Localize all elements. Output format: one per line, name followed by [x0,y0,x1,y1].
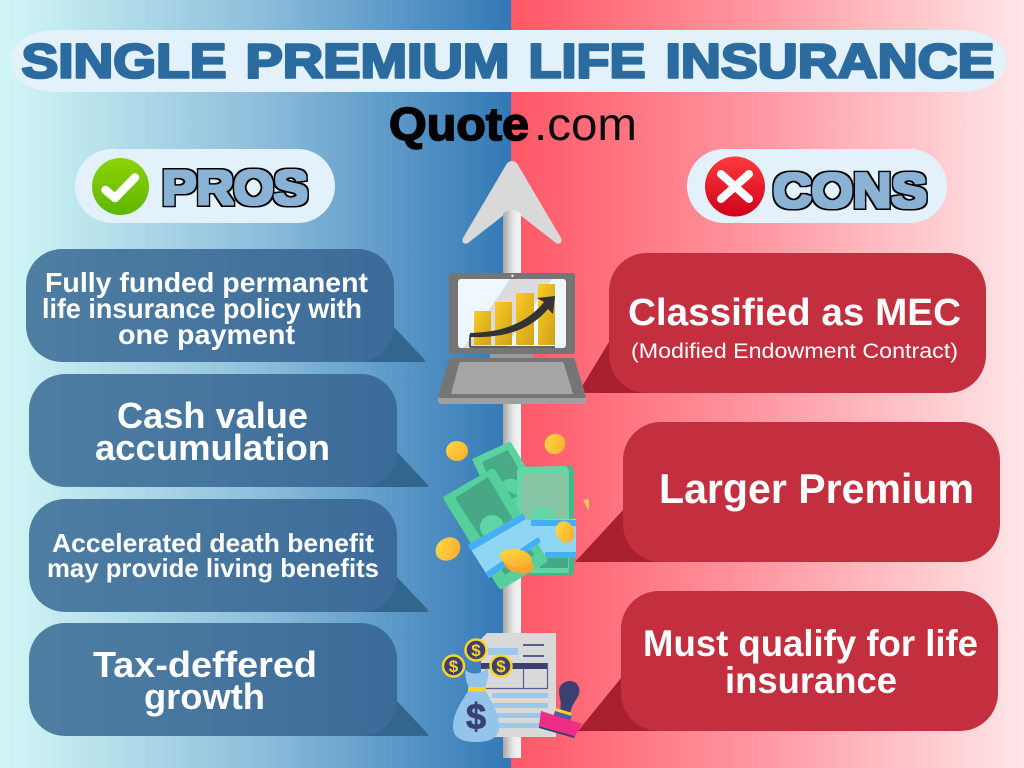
money bag: $ [466,696,486,737]
icon: policy document, money bag and stamp [443,633,582,742]
pro bubble 3 [29,499,428,612]
icon: green check [92,158,149,215]
pro bubble 2: Cash value [117,395,308,436]
pro bubble 1: life insurance policy with [42,293,362,324]
icon: laptop with growth chart [438,273,586,404]
pro bubble 3: Accelerated death benefit [52,528,374,558]
pro bubble 2 [29,374,428,487]
stamp [539,681,582,738]
con bubble 2: Larger Premium [659,465,974,512]
icon: money and coins [431,430,589,589]
pro bubble 4: growth [144,676,265,717]
logo: Quote.com [389,98,637,150]
dollar coins: $ [449,657,459,676]
title: INSURANCE [666,36,994,88]
title: SINGLE [22,36,226,88]
dollar coins: $ [471,641,481,660]
con bubble 1: Classified as MEC [628,292,961,334]
pros label: PROS [162,162,308,215]
title: PREMIUM [246,36,510,88]
pro bubble 1: Fully funded permanent [45,267,368,298]
title: LIFE [528,36,646,88]
pro bubble 4: Tax-deffered [93,644,317,685]
con bubble 1: (Modified Endowment Contract) [631,339,958,363]
logo: Quote.com: .com [534,98,637,150]
pros heading [75,149,335,223]
pro bubble 2: accumulation [95,427,330,468]
cons label: CONS [773,165,927,218]
icon: red cross [705,156,765,216]
con bubble 2 [575,422,1000,562]
dollar coins: $ [496,657,506,676]
dollar coins [443,640,512,676]
background: red cons side [511,0,1024,768]
background: blue pros side [0,0,511,768]
con bubble 1 [578,253,986,393]
central arrow [462,161,562,758]
con bubble 3 [578,591,998,731]
pro bubble 3: may provide living benefits [47,553,379,583]
title [10,30,1007,92]
con bubble 3: Must qualify for life [643,622,978,664]
logo: Quote.com: Quote [389,98,529,150]
pro bubble 4 [29,623,428,736]
con bubble 3: insurance [725,659,897,701]
pro bubble 1 [26,249,425,362]
cons heading [687,149,947,223]
pro bubble 1: one payment [118,319,295,350]
